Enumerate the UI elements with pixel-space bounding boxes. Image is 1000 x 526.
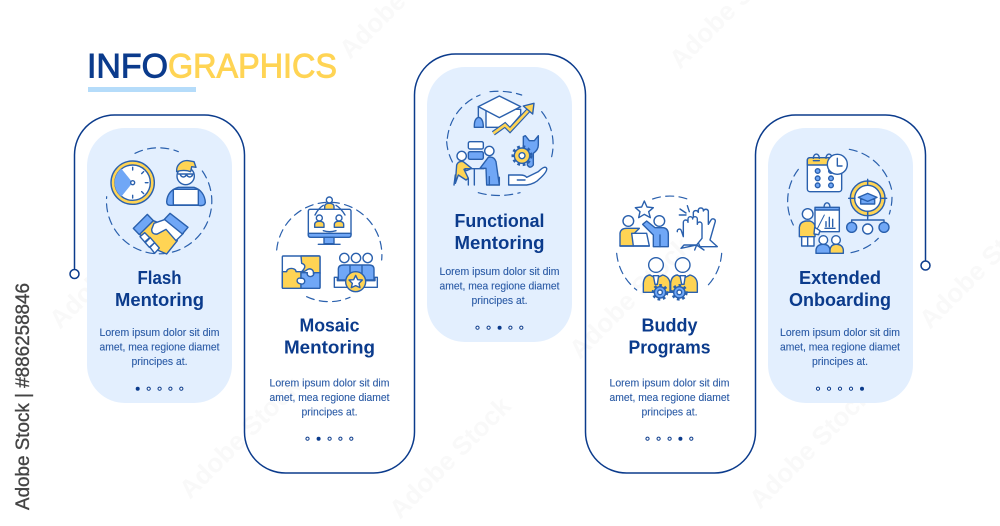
text: extended onboarding: Extended (799, 267, 881, 288)
text: extended onboarding: Lorem ipsum dolor sit dim (780, 327, 900, 339)
text: flash mentoring: Flash (138, 267, 182, 288)
text: extended onboarding (780, 267, 900, 368)
pagination dots: extended onboarding (816, 387, 864, 391)
panel background: functional mentoring (427, 67, 572, 342)
text: flash mentoring: Lorem ipsum dolor sit dim (100, 327, 220, 339)
text: functional mentoring: Mentoring (454, 232, 544, 253)
text: buddy programs: principes at. (642, 406, 698, 418)
watermark: Adobe Stock (173, 370, 307, 504)
text: functional mentoring: Lorem ipsum dolor sit dim (440, 266, 560, 278)
text: mosaic mentoring: principes at. (302, 406, 358, 418)
text: flash mentoring: principes at. (132, 356, 188, 368)
watermark: Adobe Stock (383, 390, 517, 524)
panel background: flash mentoring (87, 128, 232, 403)
text: flash mentoring: Mentoring (115, 289, 204, 310)
watermark: Adobe Stock (563, 230, 697, 364)
connecting outline (74, 54, 926, 473)
text: functional mentoring: amet, mea regione diamet (440, 280, 560, 292)
pagination dots: mosaic mentoring (306, 437, 353, 441)
title: GRAPHICS (168, 48, 337, 86)
text: mosaic mentoring: Lorem ipsum dolor sit dim (270, 378, 390, 390)
text: buddy programs: Buddy (642, 314, 698, 336)
text: extended onboarding: principes at. (812, 356, 868, 368)
icon: buddy programs (617, 196, 722, 299)
text: functional mentoring: principes at. (472, 295, 528, 307)
pagination dots: functional mentoring (476, 326, 523, 330)
text: functional mentoring (440, 210, 560, 307)
text: buddy programs: amet, mea regione diamet (610, 392, 730, 404)
end node (921, 261, 930, 270)
pagination dots: buddy programs (646, 437, 693, 441)
text: buddy programs: Lorem ipsum dolor sit dim (610, 378, 730, 390)
title underline (88, 87, 196, 92)
panel background: extended onboarding (768, 128, 913, 403)
icon: mosaic mentoring (277, 197, 382, 302)
text: buddy programs: Programs (628, 336, 710, 358)
text: mosaic mentoring: amet, mea regione diamet (270, 392, 390, 404)
text: flash mentoring (100, 267, 220, 368)
text: extended onboarding: Onboarding (789, 289, 891, 310)
icon: extended onboarding (788, 149, 892, 253)
pagination dots: flash mentoring (136, 387, 183, 391)
text: mosaic mentoring (270, 314, 390, 418)
icon: flash mentoring (106, 148, 212, 254)
watermark: Adobe Stock (43, 200, 177, 334)
text: flash mentoring: amet, mea regione diamet (100, 342, 220, 354)
title: INFO (87, 48, 168, 86)
side credit: Adobe Stock | #886258846 (13, 283, 34, 510)
text: functional mentoring: Functional (454, 210, 544, 231)
text: buddy programs (610, 314, 730, 418)
text: extended onboarding: amet, mea regione diamet (780, 342, 900, 354)
icon: functional mentoring (447, 91, 553, 195)
text: mosaic mentoring: Mentoring (284, 336, 375, 358)
title (87, 48, 337, 86)
text: mosaic mentoring: Mosaic (300, 314, 360, 336)
start node (70, 270, 79, 278)
watermark: Adobe Stock (743, 380, 877, 514)
